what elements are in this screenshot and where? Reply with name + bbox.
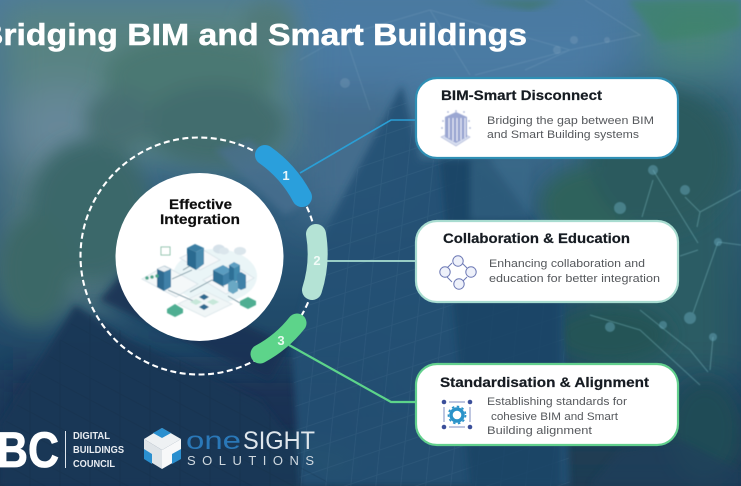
connector: line to card 3 bbox=[289, 345, 418, 402]
heading: BIM-Smart Disconnect bbox=[441, 88, 603, 103]
dots bbox=[145, 276, 149, 280]
description: Establishing standards for bbox=[487, 396, 627, 408]
description: and Smart Building systems bbox=[487, 129, 640, 141]
green chips bbox=[167, 304, 183, 317]
logo: OneSight Solutions: SOLUTIONS bbox=[187, 453, 314, 468]
description: cohesive BIM and Smart bbox=[491, 411, 618, 423]
heading: effective integration bbox=[160, 197, 240, 227]
icon: smart tower bbox=[441, 110, 471, 146]
description bbox=[487, 396, 627, 437]
heading: Standardisation & Alignment bbox=[440, 375, 650, 390]
arc segment 3: 3 bbox=[277, 333, 285, 348]
logo: OneSight Solutions: SIGHT bbox=[243, 427, 315, 455]
dashed ring bbox=[80, 138, 318, 374]
wordmark: one bbox=[186, 427, 241, 455]
logo: Digital Buildings Council bbox=[0, 422, 124, 478]
description: Building alignment bbox=[487, 425, 592, 437]
arc segment 1 bbox=[265, 155, 302, 197]
logo: OneSight Solutions bbox=[144, 427, 315, 469]
icon: gear with arrows bbox=[442, 400, 472, 429]
heading: effective integration: Effective bbox=[169, 197, 233, 212]
arc segment 2 bbox=[312, 234, 321, 290]
description bbox=[487, 115, 654, 141]
building A bbox=[157, 266, 171, 272]
logo: Digital Buildings Council: DIGITAL bbox=[73, 430, 111, 442]
tag bbox=[161, 247, 170, 255]
description: Enhancing collaboration and bbox=[489, 258, 645, 270]
building bottom right bbox=[679, 446, 719, 466]
logo: Digital Buildings Council: BUILDINGS bbox=[73, 444, 124, 456]
building left lower bbox=[44, 304, 300, 482]
connector: line to card 1 bbox=[300, 120, 418, 173]
logo: Digital Buildings Council: COUNCIL bbox=[73, 458, 116, 470]
cluster bbox=[213, 265, 232, 275]
leaves top right bbox=[628, 0, 741, 42]
roof slab behind ring bbox=[218, 140, 298, 213]
blue colour wash bbox=[2, 98, 290, 486]
clouds bbox=[213, 244, 225, 254]
arc segment 3 bbox=[260, 323, 297, 354]
connector: line to card 2 bbox=[325, 260, 418, 262]
illustration: smart city network bbox=[142, 244, 257, 317]
icon: connected people bbox=[440, 256, 476, 289]
icon: cube bbox=[144, 428, 181, 469]
panel: Standardisation & Alignment bbox=[416, 364, 678, 445]
network lines bbox=[348, 6, 640, 109]
building B bbox=[187, 244, 204, 252]
arc segment 2: 2 bbox=[313, 253, 321, 268]
description bbox=[489, 258, 660, 285]
central tower bbox=[292, 85, 570, 486]
hub bbox=[199, 294, 209, 300]
heading: effective integration: Integration bbox=[160, 212, 240, 227]
description: education for better integration bbox=[489, 273, 660, 285]
panel: effective integration circle bbox=[116, 173, 284, 341]
heading: Collaboration & Education bbox=[443, 231, 630, 246]
description: Bridging the gap between BIM bbox=[487, 115, 654, 127]
panel: BIM-Smart Disconnect bbox=[416, 78, 678, 158]
arc segment 1: 1 bbox=[282, 168, 290, 183]
panel: Collaboration & Education bbox=[416, 221, 678, 302]
